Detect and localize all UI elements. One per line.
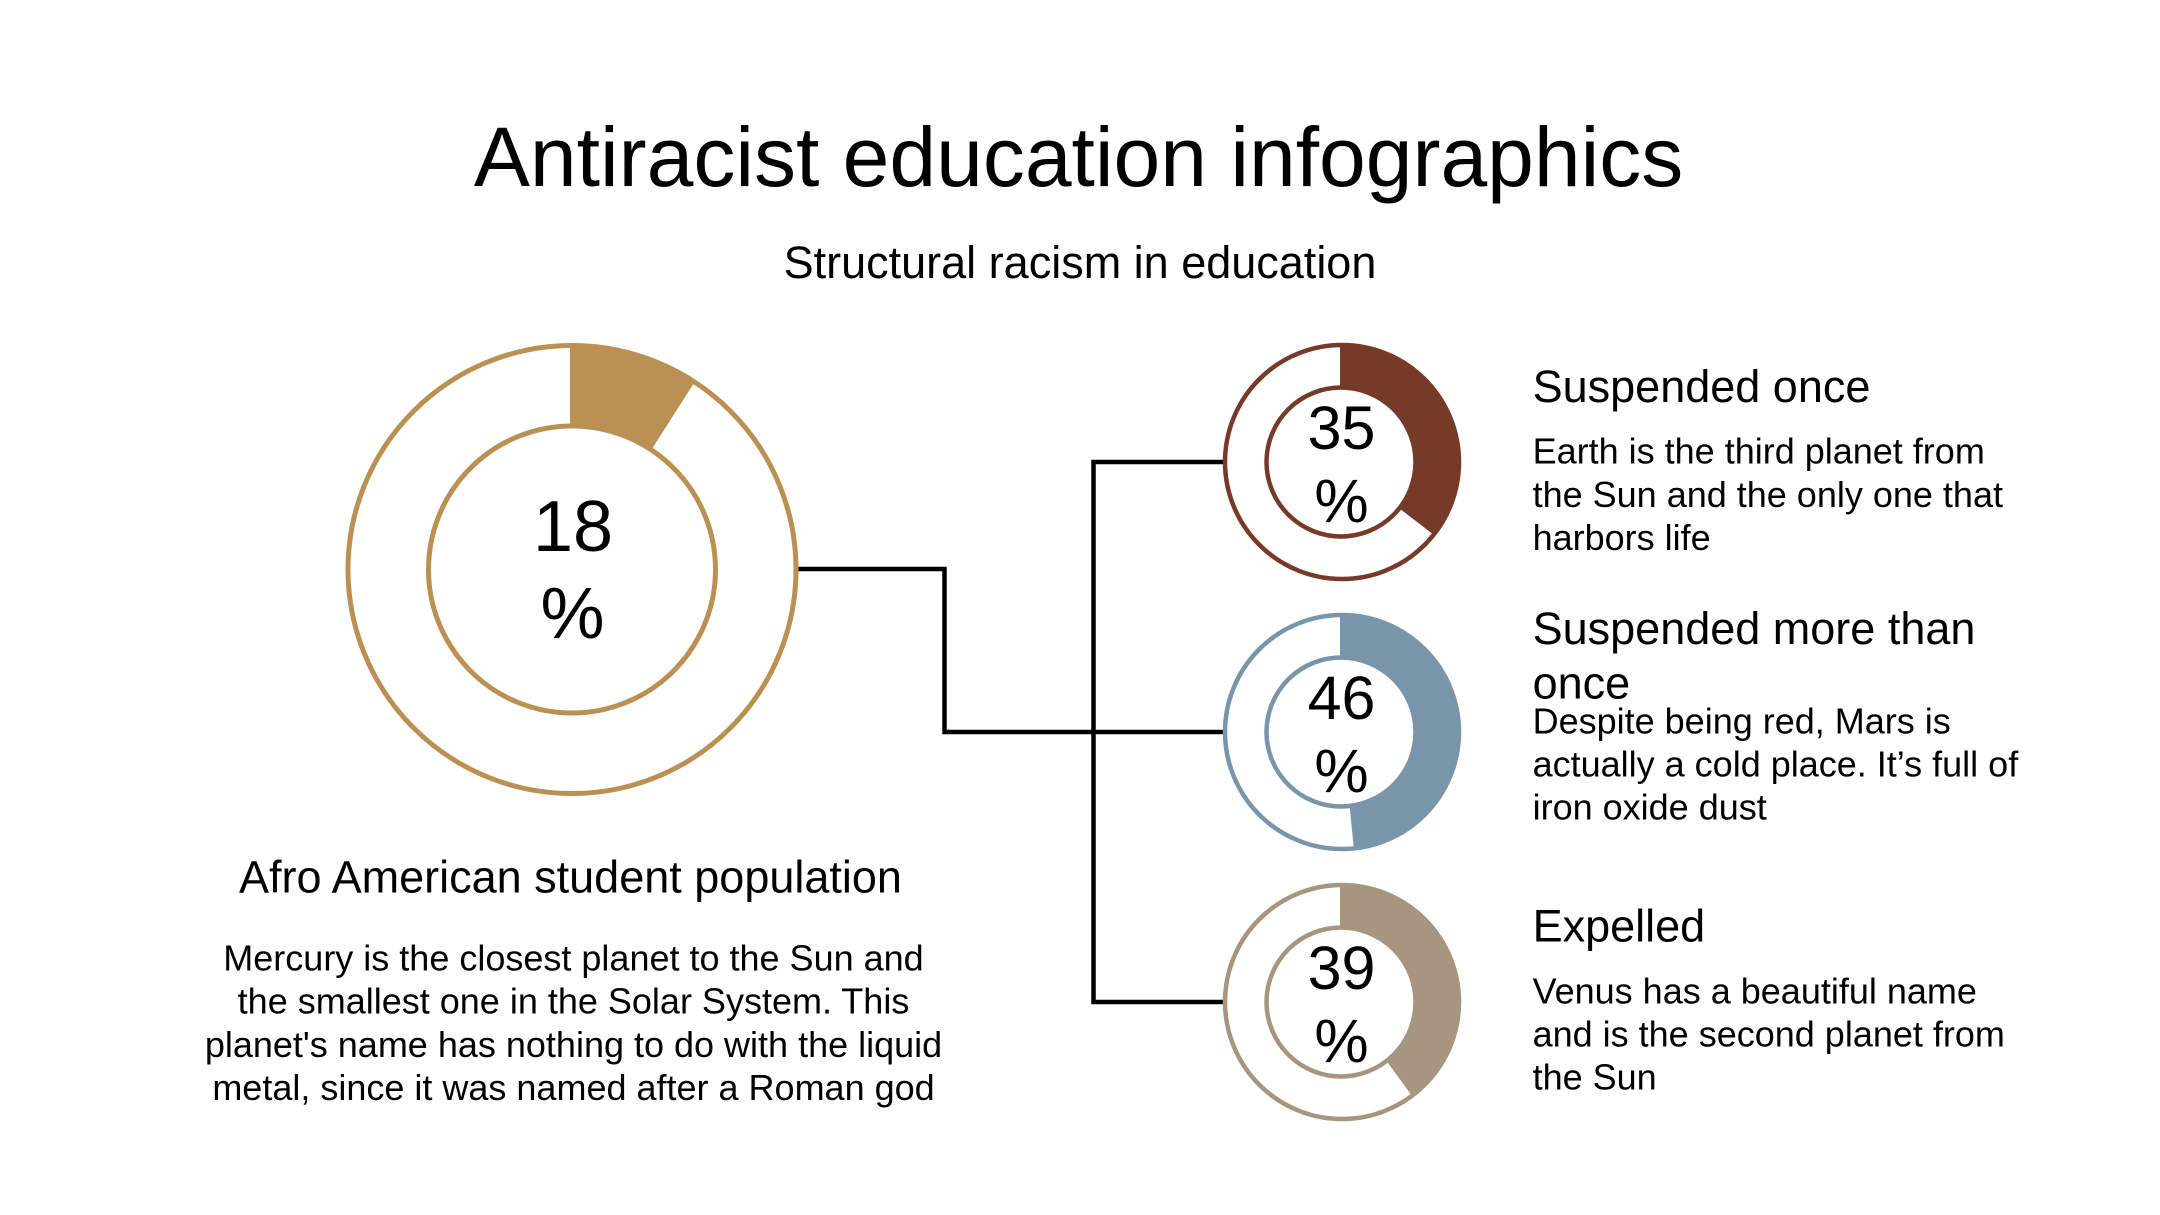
title: Antiracist education infographics <box>474 110 1683 204</box>
donut chart: 18% <box>348 345 796 794</box>
text: Venus: the Sun <box>1533 1056 1657 1098</box>
donut chart: 39% <box>1225 883 1459 1119</box>
donut value: 39%: 39 <box>1308 934 1375 1002</box>
heading: Expelled: Expelled <box>1533 900 1705 952</box>
text: Earth: the Sun and the only one that <box>1533 474 2003 515</box>
donut value: 18%: 18 <box>533 487 613 567</box>
heading: Suspended once: Suspended once <box>1533 361 1870 412</box>
donut value: 46%: % <box>1314 737 1369 805</box>
text: Mars: iron oxide dust <box>1533 786 1767 828</box>
text: Mercury: metal, since it was named after a Roman god <box>212 1067 935 1108</box>
subtitle: Structural racism in education <box>784 237 1376 288</box>
text: Mercury: the smallest one in the Solar System. This <box>238 980 909 1022</box>
donut value: 18%: % <box>540 574 605 654</box>
text: Mars: Despite being red, Mars is <box>1533 700 1951 742</box>
donut value: 35%: 35 <box>1308 394 1375 462</box>
heading: Afro American student population: Afro American student population <box>239 852 902 902</box>
text: Venus: and is the second planet from <box>1533 1014 2005 1054</box>
donut value: 46%: 46 <box>1308 664 1375 732</box>
connector lines <box>798 462 1226 1002</box>
text: Mars: actually a cold place. It’s full of <box>1533 744 2019 784</box>
text: Earth: harbors life <box>1533 517 1711 558</box>
heading: Suspended more than once: once <box>1533 658 1630 708</box>
text: Earth: Earth is the third planet from <box>1533 430 1985 472</box>
text: Mercury: Mercury is the closest planet to the Sun and <box>223 938 924 978</box>
donut value: 35%: % <box>1314 467 1369 535</box>
text: Venus: Venus has a beautiful name <box>1533 970 1977 1012</box>
text: Mercury: planet's name has nothing to do with the liquid <box>205 1024 942 1065</box>
donut chart: 46% <box>1225 613 1459 850</box>
donut chart: 35% <box>1225 343 1459 579</box>
donut value: 39%: % <box>1314 1007 1369 1075</box>
heading: Suspended more than once: Suspended more than <box>1533 603 1975 654</box>
